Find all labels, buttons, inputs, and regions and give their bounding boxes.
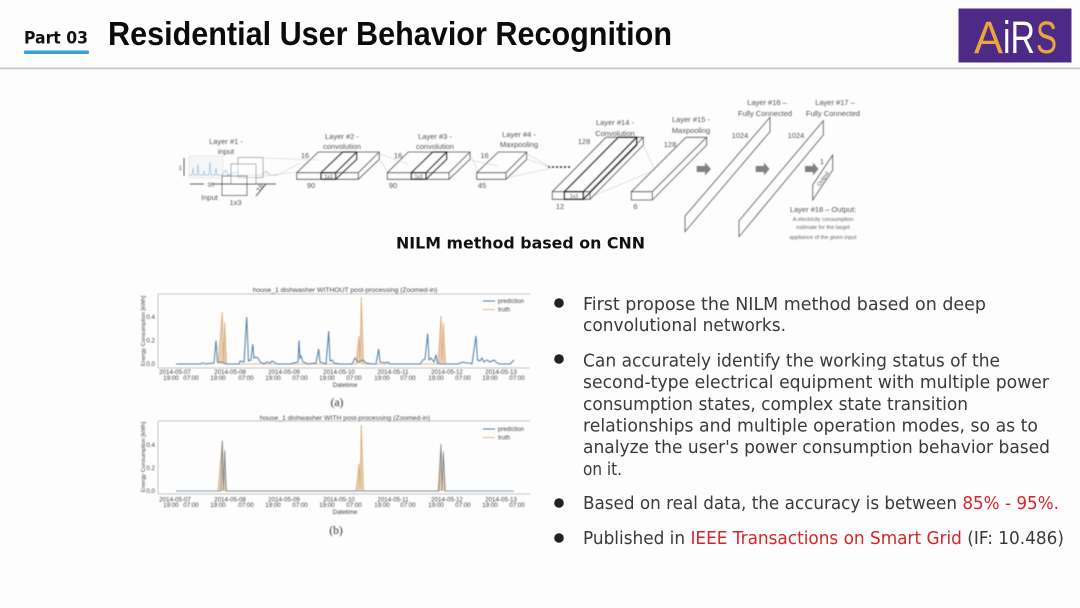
layer 18 output: Layer #18 – Output: — [790, 205, 856, 214]
layer 14 convolution: 1x3 — [570, 194, 578, 200]
legend: truth — [498, 308, 510, 314]
layer 4 maxpooling — [477, 130, 538, 190]
layer 15 maxpooling: 128 — [664, 140, 676, 149]
legend — [483, 427, 524, 442]
truth series — [218, 297, 446, 364]
x axis dates: 07:00 — [346, 375, 362, 382]
x axis dates: 19:00 — [319, 502, 335, 509]
chart a: without post-processing — [141, 287, 530, 409]
layer 1 input: Layer #1 - — [209, 137, 243, 146]
x axis dates: 2014-05-07 — [159, 496, 191, 504]
axes — [158, 294, 530, 368]
x axis dates: Datetime — [333, 509, 358, 516]
layer 16 fully connected: Fully Connected — [738, 109, 792, 118]
layer 2 convolution — [297, 132, 379, 190]
legend: prediction — [498, 427, 524, 433]
x axis dates: 19:00 — [482, 375, 498, 382]
prediction series — [176, 441, 514, 491]
x axis dates: 2014-05-08 — [214, 369, 246, 376]
x axis dates: 2014-05-12 — [431, 496, 463, 504]
x axis dates: 2014-05-11 — [377, 369, 409, 376]
bullet 2 — [554, 350, 1050, 480]
y axis title: Energy Consumption [kWh] — [141, 295, 147, 366]
x axis dates: 07:00 — [455, 375, 471, 382]
layer 18 output — [790, 155, 857, 241]
x axis dates: 07:00 — [400, 502, 416, 509]
x axis dates — [159, 496, 525, 516]
bullet 4: Published in IEEE Transactions on Smart Grid (IF: 10.486) — [583, 528, 1064, 549]
layer 14 convolution: 12 — [556, 202, 564, 211]
ellipsis — [548, 166, 572, 168]
y axis: 0.4 — [146, 314, 156, 321]
x axis dates: 2014-05-10 — [323, 496, 355, 504]
layer 15 maxpooling — [631, 115, 710, 211]
x axis dates: 19:00 — [265, 375, 281, 382]
arrow — [697, 162, 711, 176]
layer 17 fully connected: Layer #17 – — [815, 98, 856, 107]
layer 2 convolution: 1x3 — [324, 174, 333, 180]
bullet 1: convolutional networks. — [583, 315, 786, 336]
legend — [483, 299, 524, 314]
y axis: 0.2 — [146, 338, 156, 344]
part label: Part 03 — [24, 28, 88, 48]
x axis dates: 19:00 — [319, 375, 335, 382]
layer 1 input: input — [218, 147, 235, 156]
panel letter a: (a) — [331, 397, 344, 409]
x axis dates: 2014-05-10 — [323, 369, 355, 376]
layer 3 convolution: 16 — [394, 151, 402, 160]
x axis dates: 19:00 — [482, 502, 498, 509]
layer 14 convolution: 128 — [578, 137, 590, 146]
x axis dates: 19:00 — [374, 502, 390, 509]
diagram caption: NILM method based on CNN — [396, 234, 645, 252]
layer 3 convolution: convolution — [416, 142, 454, 151]
x axis dates: 19:00 — [210, 375, 226, 382]
layer 16 fully connected: 1024 — [732, 131, 748, 140]
layer 14 convolution: Layer #14 - — [596, 118, 634, 127]
title: Residential User Behavior Recognition — [108, 16, 672, 53]
connectors — [263, 145, 655, 197]
chart title: house_1 dishwasher WITHOUT post-processing (Zoomed-in) — [253, 287, 437, 294]
panel letter b: (b) — [329, 525, 343, 537]
x axis dates: 07:00 — [400, 375, 416, 382]
x axis dates: 2014-05-11 — [377, 496, 409, 504]
x axis dates: 2014-05-07 — [159, 369, 191, 376]
x axis dates: 07:00 — [509, 375, 525, 382]
x axis dates: 2014-05-09 — [268, 369, 300, 376]
truth series — [218, 425, 446, 491]
layer 4 maxpooling: Layer #4 - — [502, 130, 536, 139]
layer 4 maxpooling: 16 — [480, 151, 489, 160]
layer 18 output: appliance of the given input — [790, 235, 857, 241]
bullet list — [554, 294, 1064, 549]
x axis dates: 07:00 — [509, 502, 525, 509]
logo: iR — [1003, 12, 1035, 63]
x axis dates — [159, 369, 525, 389]
x axis dates: 2014-05-13 — [485, 496, 517, 504]
layer 18 output: Output — [816, 170, 831, 188]
x axis dates: 19:00 — [210, 502, 226, 509]
layer 3 convolution: Layer #3 - — [418, 132, 452, 141]
layer 4 maxpooling: 45 — [478, 181, 486, 190]
y axis — [146, 442, 156, 495]
layer 3 convolution: 90 — [389, 181, 397, 190]
logo: S — [1036, 12, 1057, 63]
layer 14 convolution: Convolution — [595, 129, 635, 138]
x axis dates: 07:00 — [183, 502, 199, 509]
layer 18 output: A electricity consumption — [793, 217, 853, 223]
layer 17 fully connected: 1024 — [788, 131, 804, 140]
x axis dates: 07:00 — [238, 375, 254, 382]
y axis — [146, 314, 156, 368]
layer 3 convolution — [387, 132, 470, 190]
layer 4 maxpooling: Maxpooling — [500, 140, 538, 149]
bullet 2: consumption states, complex state transition — [583, 394, 968, 415]
bullet 2: on it. — [583, 459, 622, 480]
layer 18 output: 1 — [820, 157, 824, 166]
x axis dates: 19:00 — [163, 502, 179, 509]
layer 1 input: 1 — [179, 166, 183, 172]
chart b: with post-processing — [141, 415, 530, 537]
bullet 2: relationships and multiple operation modes, so as to — [583, 416, 1038, 436]
x axis dates: 07:00 — [455, 502, 471, 509]
arrow — [756, 162, 770, 176]
legend: prediction — [498, 299, 524, 305]
layer 2 convolution: Layer #2 - — [325, 132, 359, 141]
x axis dates: Datetime — [333, 382, 358, 389]
x axis dates: 19:00 — [163, 375, 179, 382]
y axis: 0.2 — [146, 465, 156, 472]
x axis dates: 2014-05-08 — [214, 496, 246, 504]
x axis dates: 19:00 — [428, 502, 444, 509]
layer 16 fully connected — [685, 98, 792, 232]
x axis dates: 07:00 — [292, 375, 308, 382]
layer 3 convolution: 1x3 — [415, 174, 423, 180]
bullet 2: Can accurately identify the working status of the — [583, 350, 1000, 372]
logo: A — [974, 12, 1003, 63]
layer 2 convolution: 16 — [301, 151, 309, 160]
x axis dates: 07:00 — [292, 502, 308, 509]
layer 18 output: estimate for the target — [796, 225, 850, 231]
prediction series — [176, 317, 514, 364]
bullet 2: second-type electrical equipment with multiple power — [583, 372, 1050, 393]
layer 16 fully connected: Layer #16 – — [747, 98, 788, 107]
bullet 3: Based on real data, the accuracy is between 85% - 95%. — [583, 493, 1059, 514]
y axis: 0.0 — [146, 361, 156, 368]
layer 1 input: Input — [201, 193, 219, 202]
chart title: house_1 dishwasher WITH post-processing (Zoomed-in) — [260, 415, 430, 422]
header — [0, 8, 1080, 69]
legend: truth — [498, 436, 510, 442]
axes — [158, 421, 530, 494]
logo — [958, 8, 1072, 63]
x axis dates: 19:00 — [265, 502, 281, 509]
y axis: 0.0 — [146, 488, 156, 495]
x axis dates: 07:00 — [346, 502, 362, 509]
bullet 1 — [554, 294, 986, 336]
x axis dates: 19:00 — [374, 375, 390, 382]
layer 15 maxpooling: 6 — [633, 202, 638, 211]
CNN architecture diagram — [179, 98, 860, 241]
layer 15 maxpooling: Maxpooling — [672, 126, 710, 135]
bullet 1: First propose the NILM method based on deep — [583, 294, 986, 315]
layer 17 fully connected — [739, 98, 860, 237]
x axis dates: 2014-05-13 — [485, 369, 517, 376]
layer 17 fully connected: Fully Connected — [806, 109, 860, 118]
x axis dates: 2014-05-09 — [268, 496, 300, 504]
y axis title: Energy Consumption [kWh] — [141, 421, 147, 492]
layer 2 convolution: 90 — [307, 181, 315, 190]
layer 1 input — [179, 137, 276, 207]
layer 15 maxpooling: Layer #15 - — [672, 115, 710, 124]
x axis dates: 2014-05-12 — [431, 369, 463, 376]
x axis dates: 07:00 — [183, 375, 199, 382]
x axis dates: 07:00 — [238, 502, 254, 509]
layer 1 input: 1x3 — [229, 198, 242, 207]
layer 1 input: 90 — [208, 183, 215, 189]
layer 2 convolution: convolution — [323, 142, 361, 151]
bullet 2: analyze the user's power consumption behavior based — [583, 437, 1050, 458]
layer 1 input: 16 — [256, 183, 266, 193]
x axis dates: 19:00 — [428, 375, 444, 382]
y axis: 0.4 — [146, 442, 156, 449]
arrow — [805, 162, 818, 176]
layer 14 convolution — [552, 118, 643, 211]
